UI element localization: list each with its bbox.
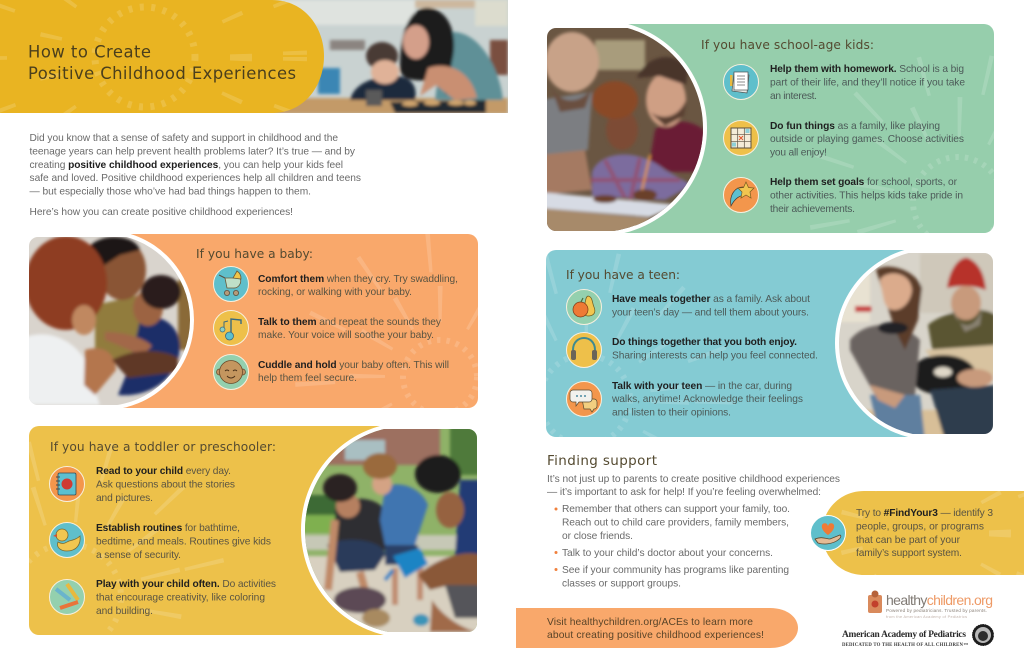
toddler tips: Establish routines for bathtime, bbox=[96, 523, 240, 534]
icon: headphones bbox=[566, 332, 602, 368]
teen tips: and listen to their opinions. bbox=[612, 408, 731, 418]
finding support heading: Finding support bbox=[547, 453, 657, 469]
teen tips: your teen’s day — and tell them about yours. bbox=[612, 308, 809, 318]
call to action banner bbox=[516, 608, 798, 648]
baby tips: Cuddle and hold your baby often. This will bbox=[258, 360, 449, 371]
icon: stroller bbox=[214, 266, 248, 302]
icon: book with apple bbox=[50, 466, 84, 502]
school tips bbox=[770, 64, 965, 215]
intro text bbox=[30, 133, 361, 218]
school tips: an interest. bbox=[770, 91, 817, 102]
intro text: safe and loved. Positive childhood experiences help all children and teens bbox=[30, 173, 361, 184]
title: Positive Childhood Experiences bbox=[28, 64, 296, 83]
school tips: you all enjoy! bbox=[770, 148, 827, 158]
callout text bbox=[856, 508, 993, 559]
school tips: Help them set goals for school, sports, or bbox=[770, 177, 958, 188]
baby photo: parents holding a baby bbox=[29, 237, 190, 405]
toddler photo: family watering plants bbox=[300, 425, 480, 640]
teen tips: Talk with your teen — in the car, during bbox=[612, 381, 792, 392]
baby tips: Comfort them when they cry. Try swaddling, bbox=[258, 274, 458, 285]
intro text: teenage years can help prevent health problems later? It’s true — and by bbox=[30, 146, 356, 158]
toddler tips: and building. bbox=[96, 606, 153, 617]
section: finding support bbox=[547, 453, 840, 590]
call to action text: about creating positive childhood experiences! bbox=[547, 630, 764, 641]
school tips: their achievements. bbox=[770, 204, 855, 215]
school tips: Help them with homework. School is a big bbox=[770, 64, 964, 75]
logo: healthychildren.org: Powered by pediatricians. Trusted by parents. bbox=[886, 608, 987, 613]
baby heading: If you have a baby: bbox=[196, 247, 313, 261]
school photo: two dads helping child with homework bbox=[547, 28, 703, 231]
toddler tips: that encourage creativity, like coloring bbox=[96, 592, 265, 604]
bullet list: or close friends. bbox=[562, 531, 633, 542]
teen tips: Have meals together as a family. Ask about bbox=[612, 294, 810, 305]
panel: toddler or preschooler bbox=[29, 426, 477, 635]
baby tips: help them feel secure. bbox=[258, 373, 357, 384]
teen tips: Do things together that you both enjoy. bbox=[612, 337, 797, 348]
icon: rubber duck bbox=[50, 522, 84, 558]
panel: school-age kids bbox=[547, 24, 994, 233]
toddler tips: bedtime, and meals. Routines give kids bbox=[96, 536, 271, 548]
toddler panel background bbox=[29, 426, 478, 635]
icon: papers bbox=[724, 64, 758, 100]
baby tips: make. Your voice will soothe your baby. bbox=[258, 330, 434, 341]
bullet list: Talk to your child’s doctor about your concerns. bbox=[562, 548, 773, 559]
toddler heading: If you have a toddler or preschooler: bbox=[50, 440, 276, 454]
school tips: Do fun things as a family, like playing bbox=[770, 121, 940, 132]
icon: hand holding heart bbox=[810, 516, 846, 550]
callout background bbox=[822, 491, 1024, 575]
bullet list: Remember that others can support your family, too. bbox=[562, 504, 790, 515]
support intro text bbox=[547, 474, 840, 498]
baby panel background bbox=[29, 234, 478, 408]
callout text: that can be part of your bbox=[856, 535, 961, 546]
panel: baby bbox=[29, 234, 478, 408]
school tips: other activities. This helps kids take pride in bbox=[770, 190, 963, 202]
callout text: people, groups, or programs bbox=[856, 522, 984, 532]
icon: shooting star bbox=[724, 178, 758, 212]
school tips: outside or playing games. Choose activities bbox=[770, 134, 964, 145]
toddler tips bbox=[96, 466, 276, 617]
toddler tips: a sense of security. bbox=[96, 550, 181, 561]
toddler tips: Read to your child every day. bbox=[96, 466, 231, 477]
intro text: — but especially those who’ve had bad things happen to them. bbox=[30, 186, 311, 198]
toddler tips: and pictures. bbox=[96, 493, 153, 504]
logo: American Academy of Pediatrics: American Academy of Pediatrics bbox=[842, 630, 966, 640]
teen photo: teen and father with a vinyl record bbox=[839, 253, 993, 434]
teen panel background bbox=[546, 250, 993, 437]
teen tips: Sharing interests can help you feel connected. bbox=[612, 350, 818, 362]
icon: fruit bbox=[566, 290, 602, 324]
bullet list: classes or support groups. bbox=[562, 578, 681, 590]
icon: music notes bbox=[214, 310, 248, 346]
teen heading: If you have a teen: bbox=[566, 268, 680, 282]
callout: FindYour3 bbox=[811, 491, 1024, 575]
icon: healthychildren family mark bbox=[868, 590, 882, 613]
bullet list: Reach out to child care providers, family members, bbox=[562, 518, 789, 528]
toddler tips: Play with your child often. Do activities bbox=[96, 579, 276, 590]
icon: speech bubbles bbox=[566, 382, 602, 416]
teen tips bbox=[611, 294, 818, 418]
icon: AAP seal bbox=[972, 624, 994, 646]
logo: American Academy of Pediatrics bbox=[842, 624, 994, 648]
baby tips: rocking, or walking with your baby. bbox=[258, 287, 412, 298]
call to action text bbox=[547, 617, 764, 641]
intro text: Here’s how you can create positive childhood experiences! bbox=[30, 207, 293, 218]
baby tips bbox=[258, 274, 458, 384]
support intro text: — it’s important to ask for help! If you’re feeling overwhelmed: bbox=[547, 487, 821, 498]
teen tips: walks, anytime! Acknowledge their feelings bbox=[611, 394, 803, 405]
header yellow shape bbox=[0, 0, 324, 113]
header banner bbox=[0, 0, 508, 113]
school panel background bbox=[547, 24, 994, 233]
school tips: part of their life, and they’ll notice if you take bbox=[770, 78, 965, 88]
intro text: Did you know that a sense of safety and support in childhood and the bbox=[30, 133, 338, 144]
toddler tips: Ask questions about the stories bbox=[96, 480, 235, 490]
callout text: Try to #FindYour3 — identify 3 bbox=[856, 508, 993, 519]
intro text: creating positive childhood experiences, you can help your kids feel bbox=[30, 160, 343, 171]
logo: healthychildren.org: healthychildren.org bbox=[886, 592, 993, 608]
support intro text: It’s not just up to parents to create positive childhood experiences bbox=[547, 474, 840, 485]
callout text: family’s support system. bbox=[856, 548, 962, 559]
bullet list bbox=[554, 504, 790, 590]
title: How to Create bbox=[28, 42, 151, 62]
icon: baby face bbox=[214, 354, 248, 390]
baby tips: Talk to them and repeat the sounds they bbox=[258, 317, 442, 328]
icon: crayons bbox=[50, 580, 84, 614]
bullet list: See if your community has programs like parenting bbox=[562, 565, 789, 576]
header photo: mother and child baking bbox=[265, 0, 508, 114]
logo: healthychildren.org: from the American Academy of Pediatrics bbox=[886, 615, 967, 619]
call to action text: Visit healthychildren.org/ACEs to learn more bbox=[547, 617, 753, 628]
icon: tic-tac-toe grid bbox=[724, 120, 758, 156]
school heading: If you have school-age kids: bbox=[701, 38, 874, 52]
title bbox=[28, 42, 296, 83]
logo: American Academy of Pediatrics: DEDICATED TO THE HEALTH OF ALL CHILDREN™ bbox=[842, 642, 968, 648]
panel: teen bbox=[546, 250, 993, 437]
logo: healthychildren.org bbox=[868, 590, 993, 619]
